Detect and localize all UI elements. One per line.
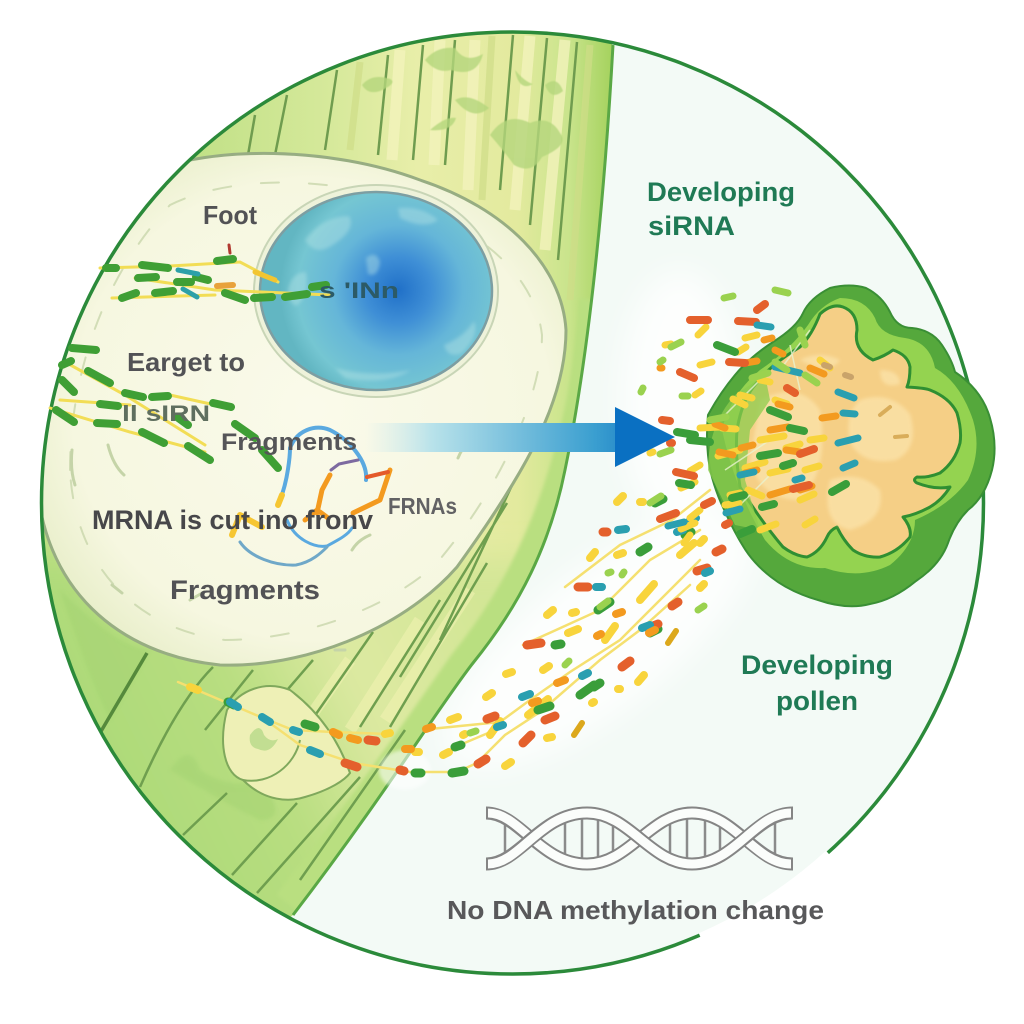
label: Developing pollen [741, 650, 893, 716]
label: Foot: Foot [203, 200, 257, 230]
label: Developing pollen: pollen [776, 686, 858, 716]
label: target to: Earget to [127, 347, 245, 377]
label: Developing pollen: Developing [741, 650, 893, 680]
nucleus [254, 185, 498, 397]
label: Fragments upper: Fragments [221, 429, 357, 456]
developing siRNA fragment spray and pollen grain [178, 286, 995, 773]
icon: DNA double helix [486, 813, 793, 864]
pointer: Foot [229, 245, 230, 253]
leaf blotches [362, 48, 563, 169]
label: Developing siRNA: siRNA [648, 211, 735, 241]
label: mRNA cut: MRNA is cut ino fronv [92, 505, 373, 535]
siRNA strand to nucleus [50, 259, 330, 468]
arrow to pollen [360, 407, 675, 467]
plant tissue stem [43, 34, 735, 917]
label: siRN: ll sIRN [122, 401, 210, 426]
long siRNA strand stream [178, 490, 722, 773]
lower tissue veins [134, 650, 274, 818]
label: Fragments lower: Fragments [170, 575, 320, 605]
pollen grain [707, 286, 995, 606]
cell body [36, 153, 566, 665]
mRNA fragments loop [232, 428, 390, 565]
label: S RNA in nucleus: s 'INn [319, 278, 399, 303]
label: Developing siRNA: Developing [647, 177, 795, 207]
label: Developing siRNA [647, 177, 795, 241]
stem edge [293, 45, 613, 915]
caption: no DNA methylation change: No DNA methylation change [447, 895, 824, 925]
label: RNAs: FRNAs [388, 493, 457, 519]
white glow behind fragments [465, 293, 735, 750]
lower pale bulge [223, 686, 350, 800]
fan of siRNA fragments [641, 290, 858, 543]
faded outline section lower right [700, 853, 828, 936]
